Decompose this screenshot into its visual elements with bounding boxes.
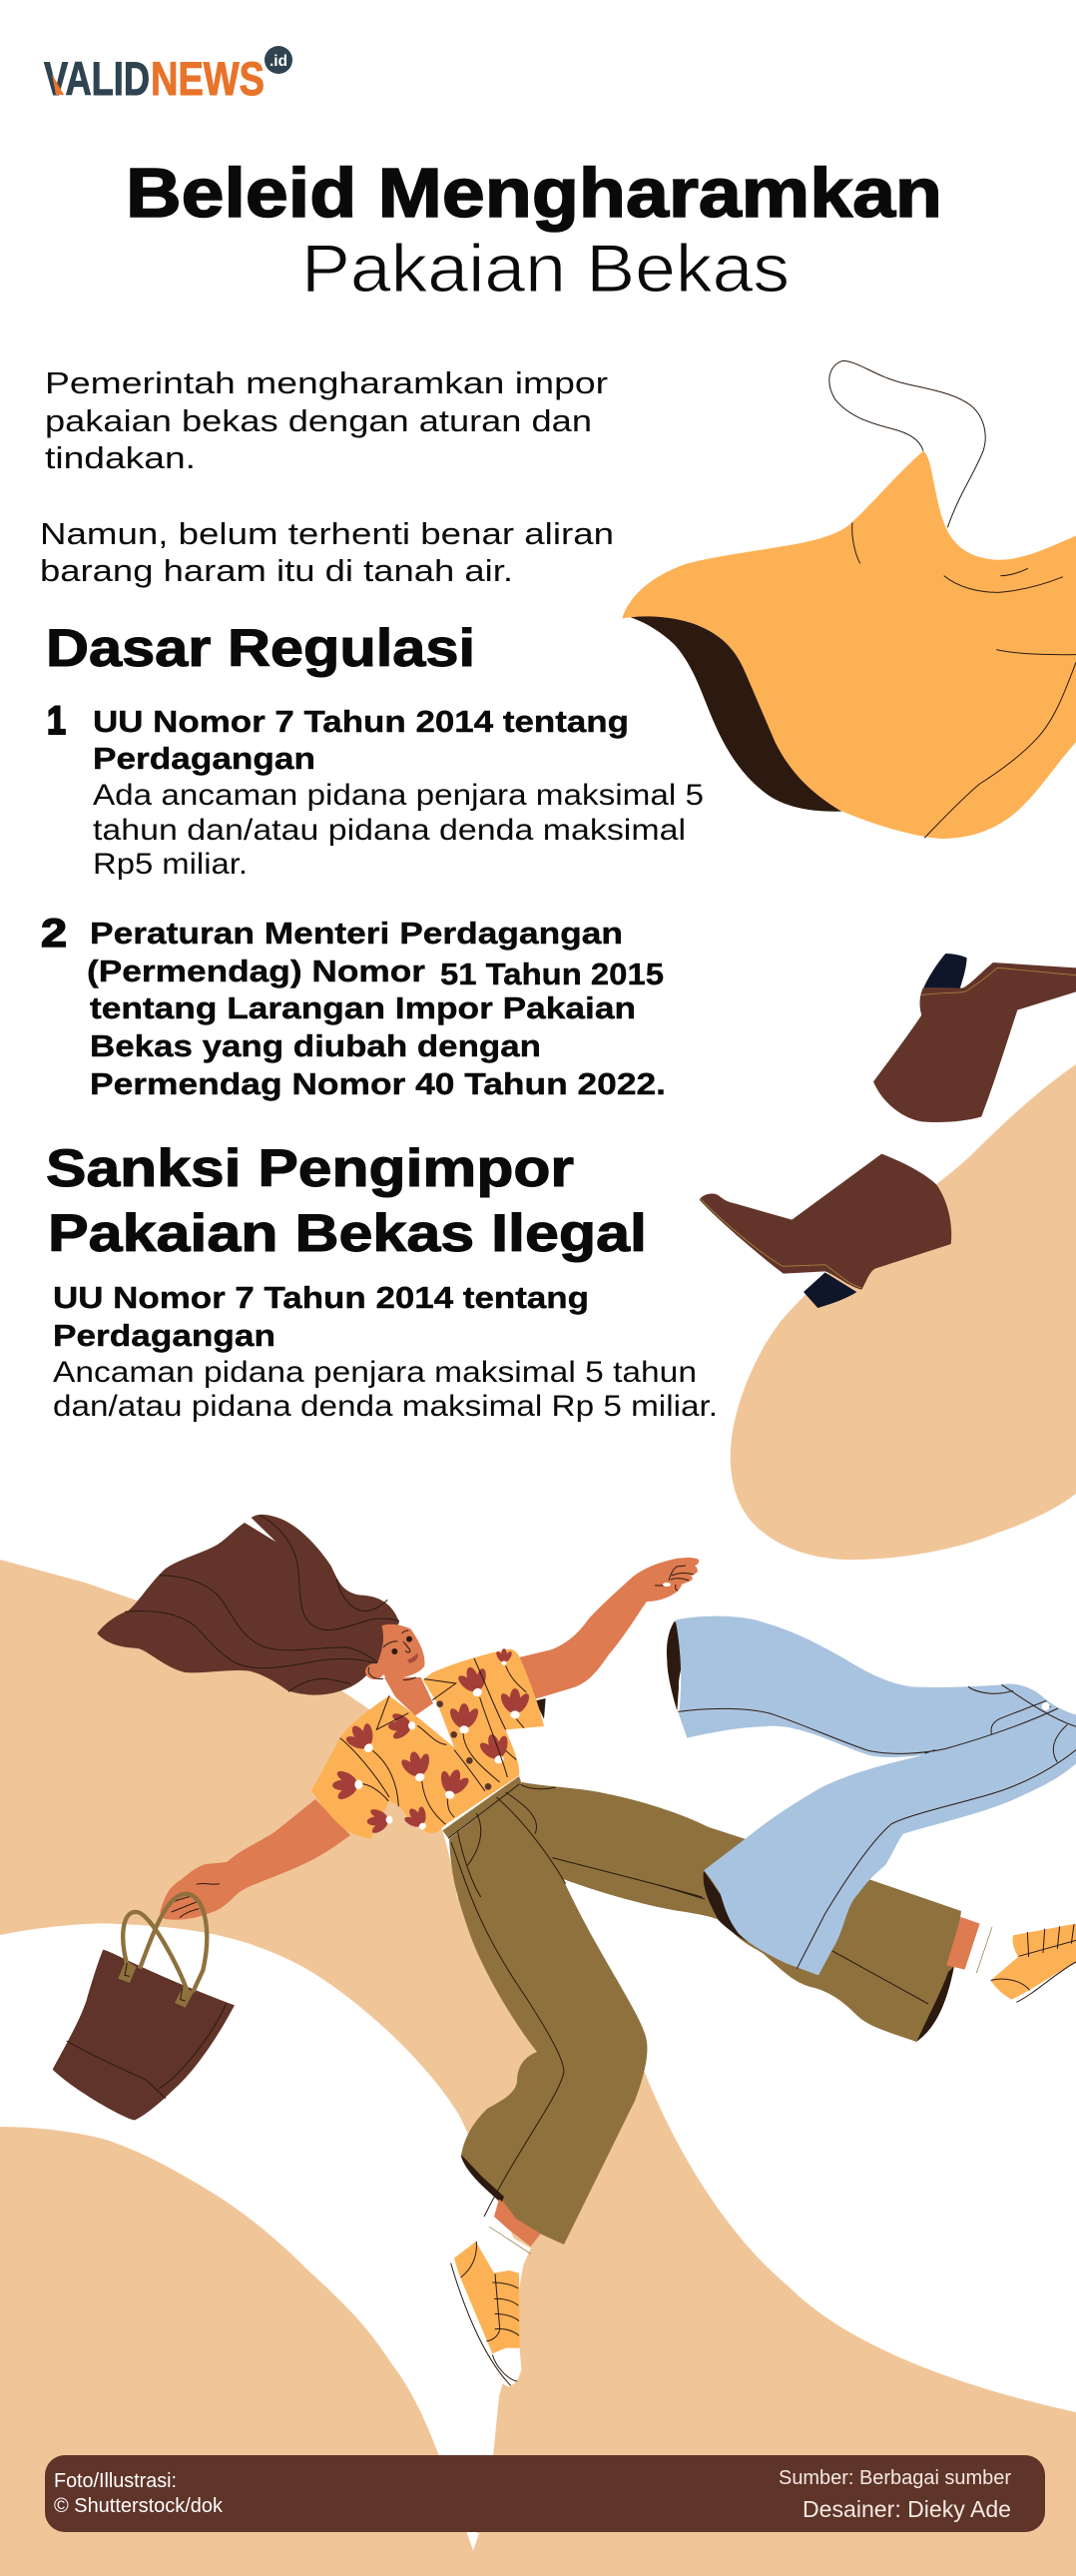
footer bar xyxy=(45,2455,1045,2532)
intro text: barang haram itu di tanah air. xyxy=(40,553,513,588)
footer bar: Sumber: Berbagai sumber xyxy=(779,2467,1011,2489)
regulation 1: Rp5 miliar. xyxy=(93,848,248,881)
illustration: brown tote bag xyxy=(53,1877,269,2120)
lower arm and hand xyxy=(160,1799,350,1920)
olive pants xyxy=(449,1782,961,2245)
regulation 2: Bekas yang diubah dengan xyxy=(90,1028,541,1063)
footer bar: Foto/Illustrasi: xyxy=(54,2470,177,2492)
regulation 1: Perdagangan xyxy=(93,741,315,776)
hand over bag handle xyxy=(163,1877,269,1919)
shirt body xyxy=(311,1649,544,1839)
ear xyxy=(365,1663,384,1679)
hair xyxy=(97,1515,399,1695)
raised arm and hand xyxy=(519,1558,699,1700)
regulation 2: Permendag Nomor 40 Tahun 2022. xyxy=(90,1066,666,1101)
right leg sneaker xyxy=(946,1917,1076,2002)
face xyxy=(377,1624,424,1680)
heading: Sanksi xyxy=(46,1139,647,1263)
regulation 1 xyxy=(47,699,704,881)
illustration: flying orange shirt xyxy=(622,361,1076,839)
title: Pakaian Bekas xyxy=(301,231,790,307)
sanction text: dan/atau pidana denda maksimal Rp 5 miliar. xyxy=(53,1390,718,1423)
sanction text: Perdagangan xyxy=(53,1318,275,1353)
illustration: upper boot xyxy=(873,954,1076,1122)
heading: Sanksi: Pakaian Bekas Ilegal xyxy=(48,1204,647,1263)
intro text: Pemerintah mengharamkan impor xyxy=(45,365,608,400)
logo: .id xyxy=(269,53,287,70)
heading: Dasar Regulasi: Dasar Regulasi xyxy=(46,619,475,678)
lower leg with sneaker xyxy=(449,2155,542,2387)
logo: VALID xyxy=(44,52,150,105)
shirt lines and buttons xyxy=(340,1658,526,1824)
heading: Sanksi: Sanksi Pengimpor xyxy=(46,1139,574,1198)
title: Beleid Mengharamkan xyxy=(126,154,942,232)
regulation 2: 51 Tahun 2015 xyxy=(440,957,664,991)
sanction text xyxy=(53,1280,718,1423)
background blob: top right beige xyxy=(731,1064,1076,1560)
regulation 2: Peraturan Menteri Perdagangan xyxy=(90,916,623,951)
intro text xyxy=(40,365,614,588)
neck xyxy=(384,1677,433,1715)
regulation 2 xyxy=(41,912,666,1101)
regulation 1: 1 xyxy=(47,699,66,743)
regulation 1: tahun dan/atau pidana denda maksimal xyxy=(93,814,686,847)
regulation 1: UU Nomor 7 Tahun 2014 tentang xyxy=(93,704,629,739)
lower cuff xyxy=(461,2155,504,2202)
white tip below footer xyxy=(468,2533,479,2551)
title xyxy=(126,154,942,307)
right leg cuff xyxy=(916,1966,954,2042)
regulation 2: 2 xyxy=(41,912,67,956)
illustration: lower boot xyxy=(700,1154,951,1308)
intro text: tindakan. xyxy=(45,440,196,475)
pants seam: bent leg xyxy=(451,1842,564,2217)
intro text: Namun, belum terhenti benar aliran xyxy=(40,516,614,551)
footer bar: Desainer: Dieky Ade xyxy=(803,2496,1011,2522)
illustration: flying blue jeans xyxy=(667,1616,1076,1975)
footer bar: © Shutterstock/dok xyxy=(54,2495,224,2517)
logo: NEWS xyxy=(151,52,265,105)
sanction text: Ancaman pidana penjara maksimal 5 tahun xyxy=(53,1356,697,1389)
regulation 2: (Permendag) Nomor xyxy=(87,954,425,988)
background: bottom beige waves xyxy=(0,1560,1076,2576)
face and shirt xyxy=(311,1624,546,1839)
regulation 1: Ada ancaman pidana penjara maksimal 5 xyxy=(93,779,704,812)
regulation 2: tentang Larangan Impor Pakaian xyxy=(90,990,636,1025)
sanction text: UU Nomor 7 Tahun 2014 tentang xyxy=(53,1280,589,1315)
pants seam: right leg xyxy=(659,1885,928,2004)
logo xyxy=(44,46,292,105)
intro text: pakaian bekas dengan aturan dan xyxy=(45,403,592,438)
shirt flowers xyxy=(447,1703,481,1733)
illustration: woman figure xyxy=(97,1515,1076,2387)
pants waistband and seams xyxy=(442,1776,702,1897)
